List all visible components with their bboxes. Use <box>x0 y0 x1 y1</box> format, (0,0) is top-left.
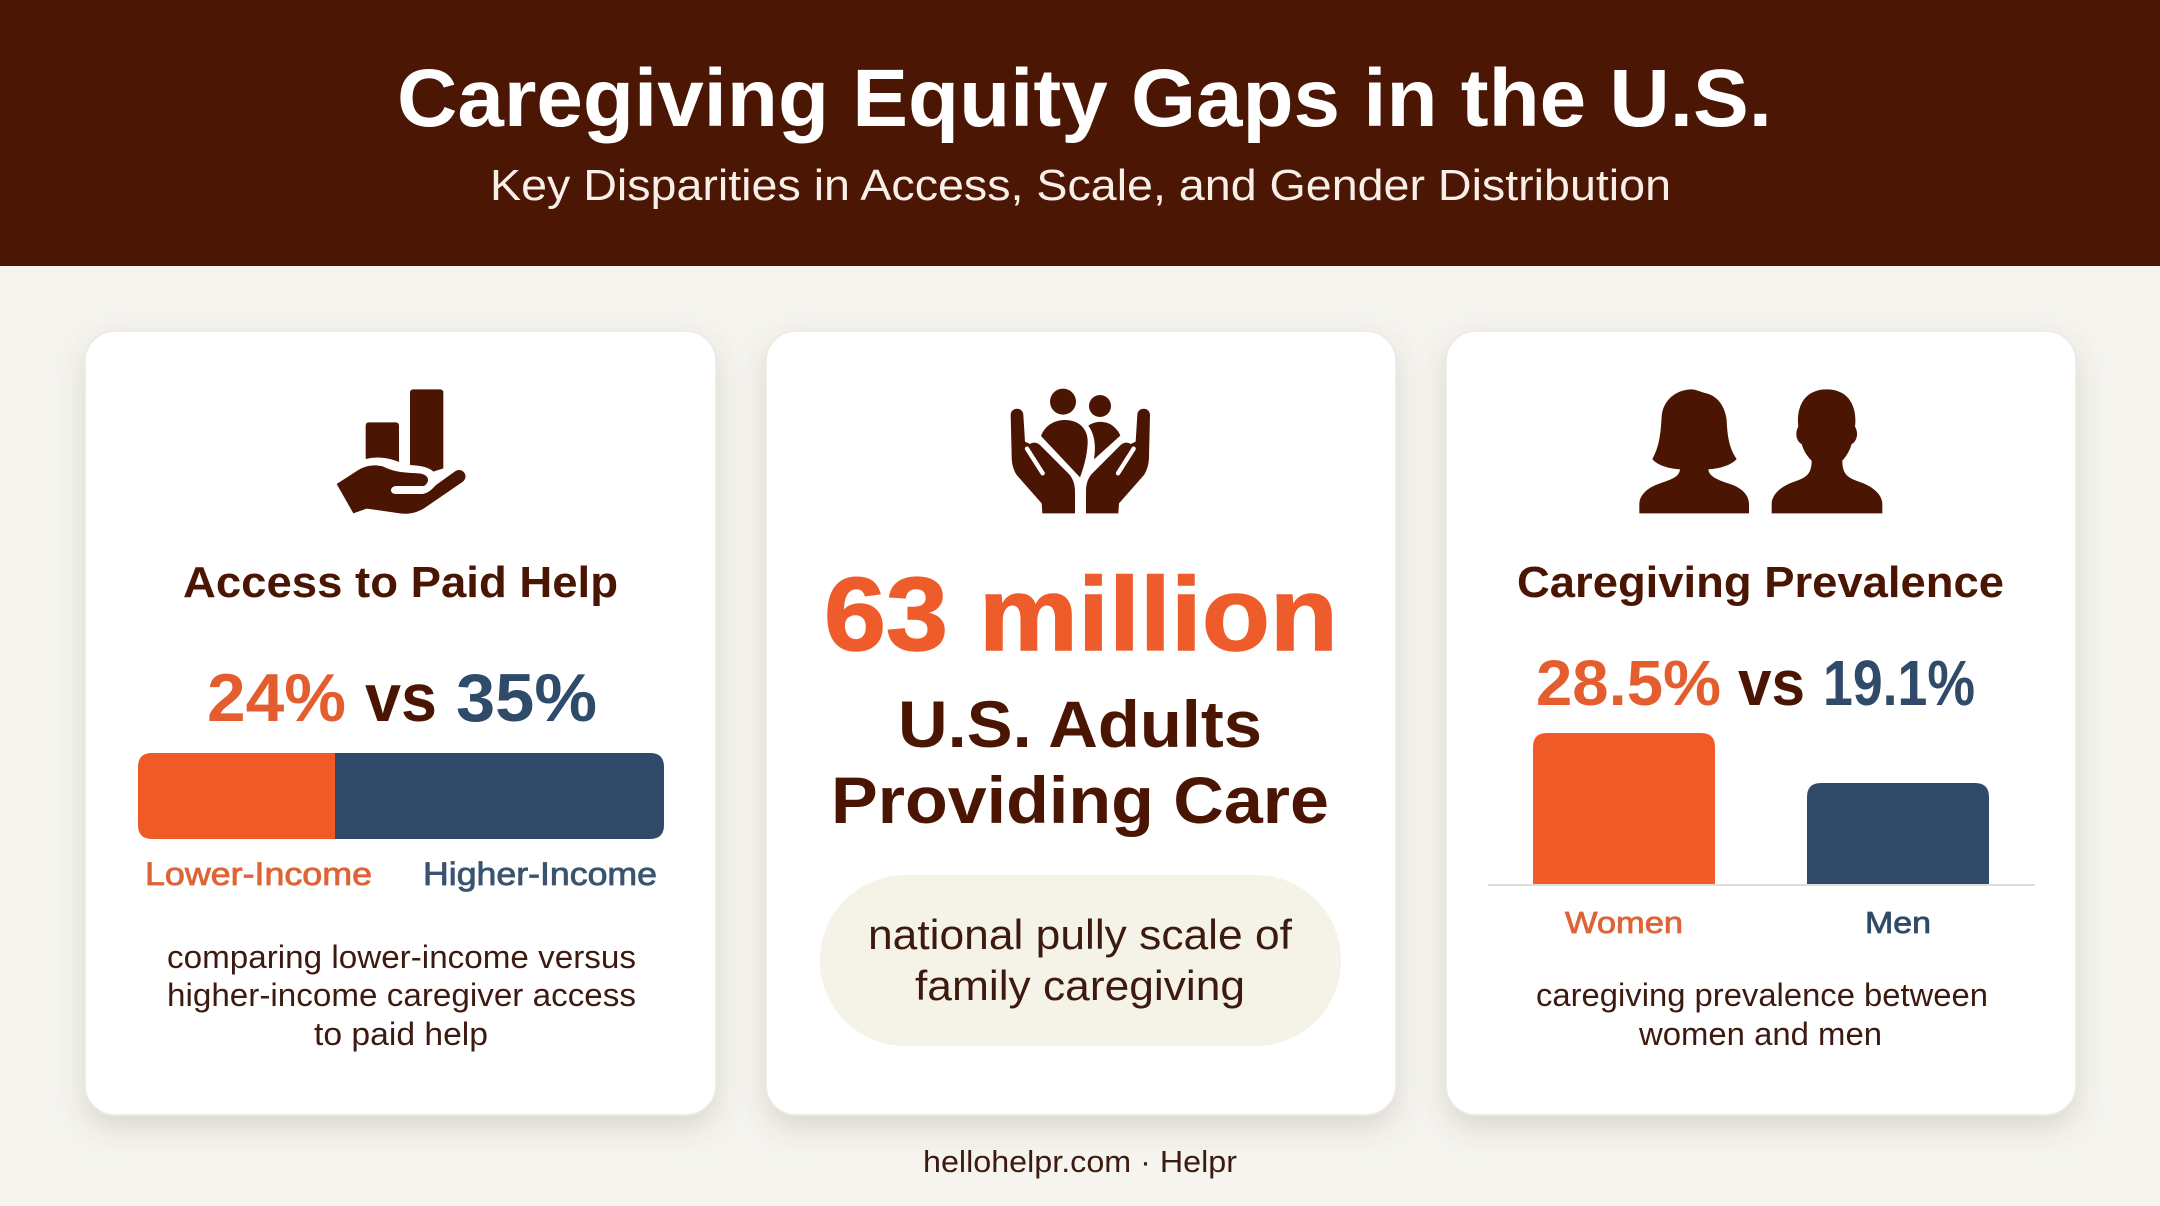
bar chart <box>1488 733 2035 886</box>
title: Caregiving Equity Gaps in the U.S. <box>397 53 1772 144</box>
stat: 24% vs 35%: vs <box>365 660 437 736</box>
icon: hand holding bars <box>337 389 465 514</box>
panel: access to paid help <box>85 331 716 1115</box>
callout pill: family caregiving <box>915 962 1245 1009</box>
stat: 24% vs 35%: 35% <box>456 660 597 736</box>
panel: national scale <box>766 331 1396 1115</box>
header banner <box>0 0 2160 266</box>
description: caregiving prevalence between <box>1536 977 1988 1013</box>
stat: 24% vs 35% <box>207 660 597 736</box>
footer: hellohelpr.com · Helpr <box>923 1144 1237 1179</box>
subtitle: Key Disparities in Access, Scale, and Gender Distribution <box>490 161 1671 210</box>
stat: 28.5% vs 19.1%: 28.5% <box>1536 647 1721 719</box>
icon: woman and man silhouettes <box>1639 389 1882 513</box>
heading: Caregiving Prevalence <box>1517 558 2004 607</box>
stat: 24% vs 35%: 24% <box>207 660 346 736</box>
label: lower-income: Lower-Income <box>145 856 372 892</box>
stat: 28.5% vs 19.1%: 19.1% <box>1823 647 1975 719</box>
stat: 28.5% vs 19.1% <box>1536 647 1975 719</box>
big number: 63 million <box>824 557 1338 673</box>
description: comparing lower-income versus <box>167 939 636 975</box>
label: men: Men <box>1865 905 1931 940</box>
description <box>1536 977 1988 1052</box>
label: women: Women <box>1565 905 1683 940</box>
heading: U.S. Adults <box>898 687 1262 761</box>
stat: 28.5% vs 19.1%: vs <box>1738 647 1805 719</box>
description <box>167 939 636 1052</box>
label: higher-income: Higher-Income <box>423 856 657 892</box>
callout pill <box>820 875 1341 1046</box>
description: to paid help <box>314 1016 488 1052</box>
description: higher-income caregiver access <box>167 977 636 1013</box>
description: women and men <box>1638 1016 1882 1052</box>
heading <box>831 687 1329 837</box>
callout pill: national pully scale of <box>868 911 1292 958</box>
heading: Providing Care <box>831 763 1329 837</box>
stacked bar <box>138 753 664 839</box>
heading: Access to Paid Help <box>183 558 618 607</box>
icon: hands holding family <box>1011 389 1150 513</box>
panel: caregiving prevalence <box>1446 331 2076 1115</box>
